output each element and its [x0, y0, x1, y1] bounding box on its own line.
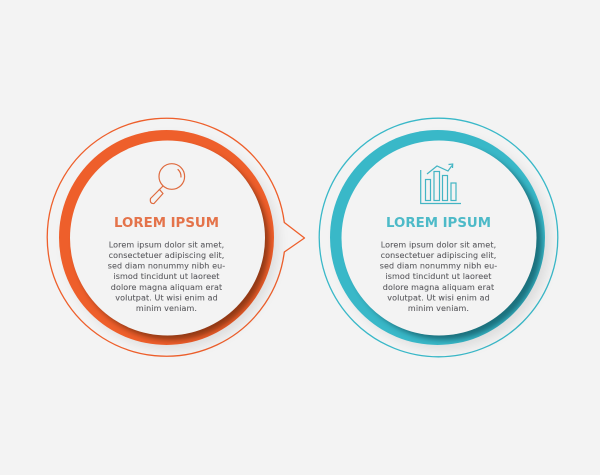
- body text: dolore magna aliquam erat: [111, 283, 222, 292]
- heading: LOREM IPSUM: [386, 216, 491, 231]
- ring drop shadow: [66, 137, 278, 349]
- teal ring: [330, 130, 545, 345]
- body text: volutpat. Ut wisi enim ad: [115, 293, 218, 302]
- body text: [108, 240, 225, 313]
- outer speech-bubble outline: [47, 118, 305, 356]
- inner white disc: [70, 140, 265, 336]
- body text: ismod tincidunt ut laoreet: [113, 272, 220, 281]
- panel: right teal circle: [319, 118, 558, 357]
- body text: minim veniam.: [408, 304, 469, 313]
- outer outline: [319, 118, 558, 357]
- body text: dolore magna aliquam erat: [383, 283, 494, 292]
- body text: minim veniam.: [136, 304, 197, 313]
- panel: left orange circle: [47, 118, 305, 356]
- body text: [380, 240, 497, 313]
- body text: volutpat. Ut wisi enim ad: [387, 293, 490, 302]
- body text: Lorem ipsum dolor sit amet,: [381, 240, 496, 250]
- body text: sed diam nonummy nibh eu-: [108, 262, 225, 270]
- ring drop shadow: [338, 137, 550, 349]
- inner white disc: [342, 140, 536, 336]
- icon: magnifying glass: [150, 164, 185, 204]
- body text: ismod tincidunt ut laoreet: [385, 272, 492, 281]
- body text: consectetuer adipiscing elit,: [381, 251, 496, 260]
- body text: Lorem ipsum dolor sit amet,: [109, 240, 224, 250]
- orange ring: [59, 130, 274, 345]
- heading: LOREM IPSUM: [114, 216, 219, 231]
- body text: consectetuer adipiscing elit,: [109, 251, 224, 260]
- icon: bar chart with arrow: [421, 164, 461, 204]
- body text: sed diam nonummy nibh eu-: [380, 262, 497, 270]
